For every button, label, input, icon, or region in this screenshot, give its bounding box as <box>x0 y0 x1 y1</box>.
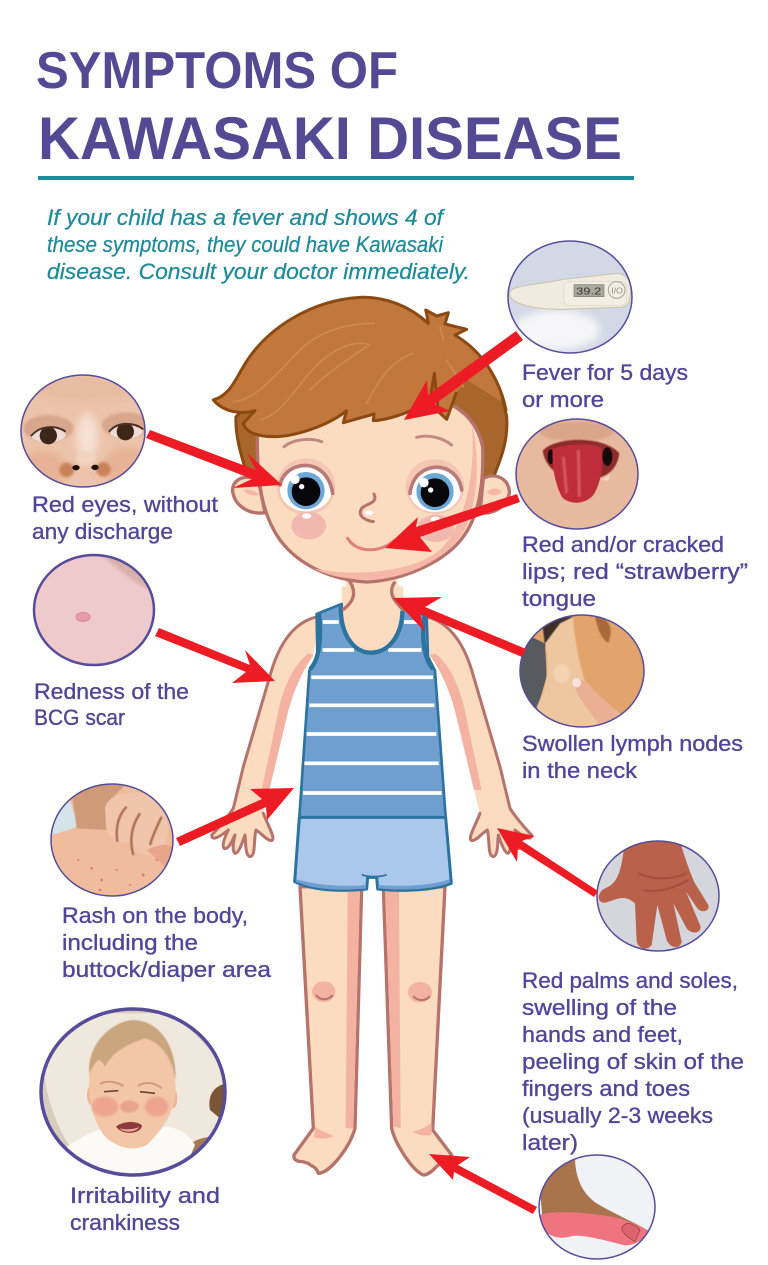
label: BCG scar: Redness of the <box>34 679 189 704</box>
arms and torso <box>212 587 532 890</box>
label: red eyes: Red eyes, without <box>32 492 218 517</box>
intro text: disease. Consult your doctor immediately. <box>47 259 470 284</box>
intro text: If your child has a fever and shows 4 of <box>47 205 446 230</box>
left arm <box>212 617 318 857</box>
title: KAWASAKI DISEASE <box>38 105 622 172</box>
label: irritability <box>70 1183 220 1235</box>
photo: thermometer: 39.2 <box>576 286 602 297</box>
label: palms and soles <box>522 968 744 1155</box>
photo: foot <box>538 1154 656 1260</box>
arrow: BCG scar <box>155 628 275 683</box>
photo: hand <box>596 840 720 952</box>
neck <box>342 587 403 627</box>
label: palms and soles: hands and feet, <box>522 1022 683 1047</box>
label: rash <box>62 903 272 982</box>
label: lips and tongue: Red and/or cracked <box>522 532 724 557</box>
neck sides <box>343 577 404 611</box>
face <box>257 390 483 582</box>
label: lymph nodes <box>522 731 743 783</box>
label: BCG scar <box>34 679 189 730</box>
symptom: rash <box>45 780 272 982</box>
arrow: neck <box>393 597 526 657</box>
legs <box>294 887 452 1175</box>
label: rash: Rash on the body, <box>62 903 248 928</box>
label: irritability: Irritability and <box>70 1183 220 1208</box>
symptom: lymph nodes <box>515 610 743 783</box>
arrow: lips <box>385 494 520 552</box>
title underline <box>38 176 634 180</box>
photo: thermometer <box>505 238 635 358</box>
photo: BCG scar <box>32 554 156 666</box>
symptom: BCG scar <box>30 550 189 730</box>
boy illustration <box>212 297 532 1175</box>
arrow: hand <box>497 828 598 897</box>
nose <box>360 494 375 522</box>
label: rash: buttock/diaper area <box>62 957 272 982</box>
intro text <box>47 205 470 284</box>
shorts <box>295 817 451 890</box>
ears <box>233 476 509 513</box>
symptom: fever <box>505 238 688 412</box>
label: palms and soles: (usually 2-3 weeks <box>522 1103 713 1128</box>
tank top <box>299 604 446 817</box>
title: SYMPTOMS OF <box>36 42 398 100</box>
photo: eyes <box>20 374 146 488</box>
intro text: these symptoms, they could have Kawasaki <box>47 232 444 257</box>
label: lymph nodes: Swollen lymph nodes <box>522 731 743 756</box>
arrow: foot <box>429 1154 537 1214</box>
photo: tongue <box>515 418 639 530</box>
photo: thermometer: I/O <box>611 285 623 295</box>
label: lips and tongue: tongue <box>522 586 596 611</box>
right arm <box>425 617 532 857</box>
label: palms and soles: Red palms and soles, <box>522 968 738 993</box>
label: lips and tongue <box>522 532 748 611</box>
label: palms and soles: fingers and toes <box>522 1076 690 1101</box>
arrow: rash <box>176 788 294 846</box>
symptom: red eyes <box>15 370 218 544</box>
eyebrows <box>284 436 452 447</box>
symptom: palms and soles <box>522 835 744 1265</box>
symptom: lips and tongue <box>510 415 748 611</box>
label: lymph nodes: in the neck <box>522 758 638 783</box>
front hair <box>213 297 506 437</box>
label: palms and soles: later) <box>522 1130 578 1155</box>
arrow: fever to forehead <box>404 331 523 420</box>
photo: crying baby <box>35 1005 235 1180</box>
photo: rash <box>50 783 174 897</box>
mouth <box>348 538 395 550</box>
label: irritability: crankiness <box>70 1210 180 1235</box>
label: lips and tongue: lips; red “strawberry” <box>522 559 748 584</box>
eyes <box>277 458 464 515</box>
arrow: red eyes <box>146 430 282 488</box>
label: palms and soles: peeling of skin of the <box>522 1049 744 1074</box>
label: BCG scar: BCG scar <box>34 705 125 730</box>
label: fever <box>522 360 688 412</box>
head <box>213 297 509 611</box>
label: palms and soles: swelling of the <box>522 995 677 1020</box>
label: red eyes: any discharge <box>32 519 173 544</box>
title <box>36 42 622 172</box>
label: fever: Fever for 5 days <box>522 360 688 385</box>
photo: neck <box>519 614 645 728</box>
symptom: irritability <box>35 1005 235 1235</box>
cheeks <box>291 512 326 539</box>
label: red eyes <box>32 492 218 544</box>
back hair <box>236 340 507 477</box>
label: rash: including the <box>62 930 198 955</box>
label: fever: or more <box>522 387 604 412</box>
